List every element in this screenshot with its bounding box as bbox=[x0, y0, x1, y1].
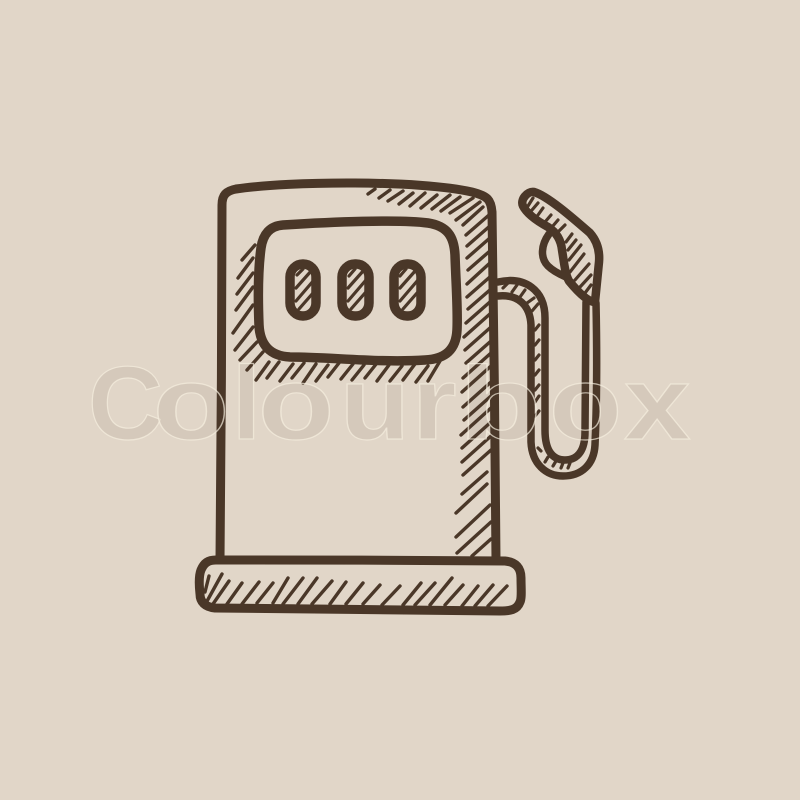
pump body hatching bbox=[368, 189, 491, 556]
watermark: Colourbox bbox=[88, 345, 691, 462]
watermark: Colourbox: x bbox=[624, 345, 691, 461]
watermark: Colourbox: o bbox=[549, 345, 622, 461]
digit hatching bbox=[296, 269, 418, 309]
hose lines bbox=[498, 281, 586, 460]
watermark: Colourbox: r bbox=[412, 346, 457, 462]
watermark: Colourbox: l bbox=[232, 346, 261, 462]
digit counters bbox=[290, 264, 421, 316]
base plinth bbox=[199, 560, 521, 611]
icon: fuel pump bbox=[199, 183, 599, 611]
display hatching bbox=[233, 245, 440, 383]
watermark: Colourbox: b bbox=[459, 345, 542, 461]
display screen bbox=[258, 221, 457, 361]
pump body outline bbox=[220, 183, 496, 560]
fuel hose bbox=[498, 281, 597, 476]
base hatching bbox=[205, 574, 507, 606]
digit windows bbox=[290, 264, 421, 316]
watermark: Colourbox: o bbox=[258, 346, 334, 462]
watermark: Colourbox: C bbox=[88, 346, 163, 462]
watermark: Colourbox: u bbox=[340, 346, 410, 462]
nozzle outline bbox=[522, 192, 599, 302]
watermark: Colourbox: o bbox=[153, 346, 229, 462]
fuel nozzle bbox=[522, 192, 599, 302]
nozzle trigger bbox=[542, 234, 566, 277]
hose hatching bbox=[503, 283, 570, 468]
nozzle hatching bbox=[528, 198, 591, 293]
